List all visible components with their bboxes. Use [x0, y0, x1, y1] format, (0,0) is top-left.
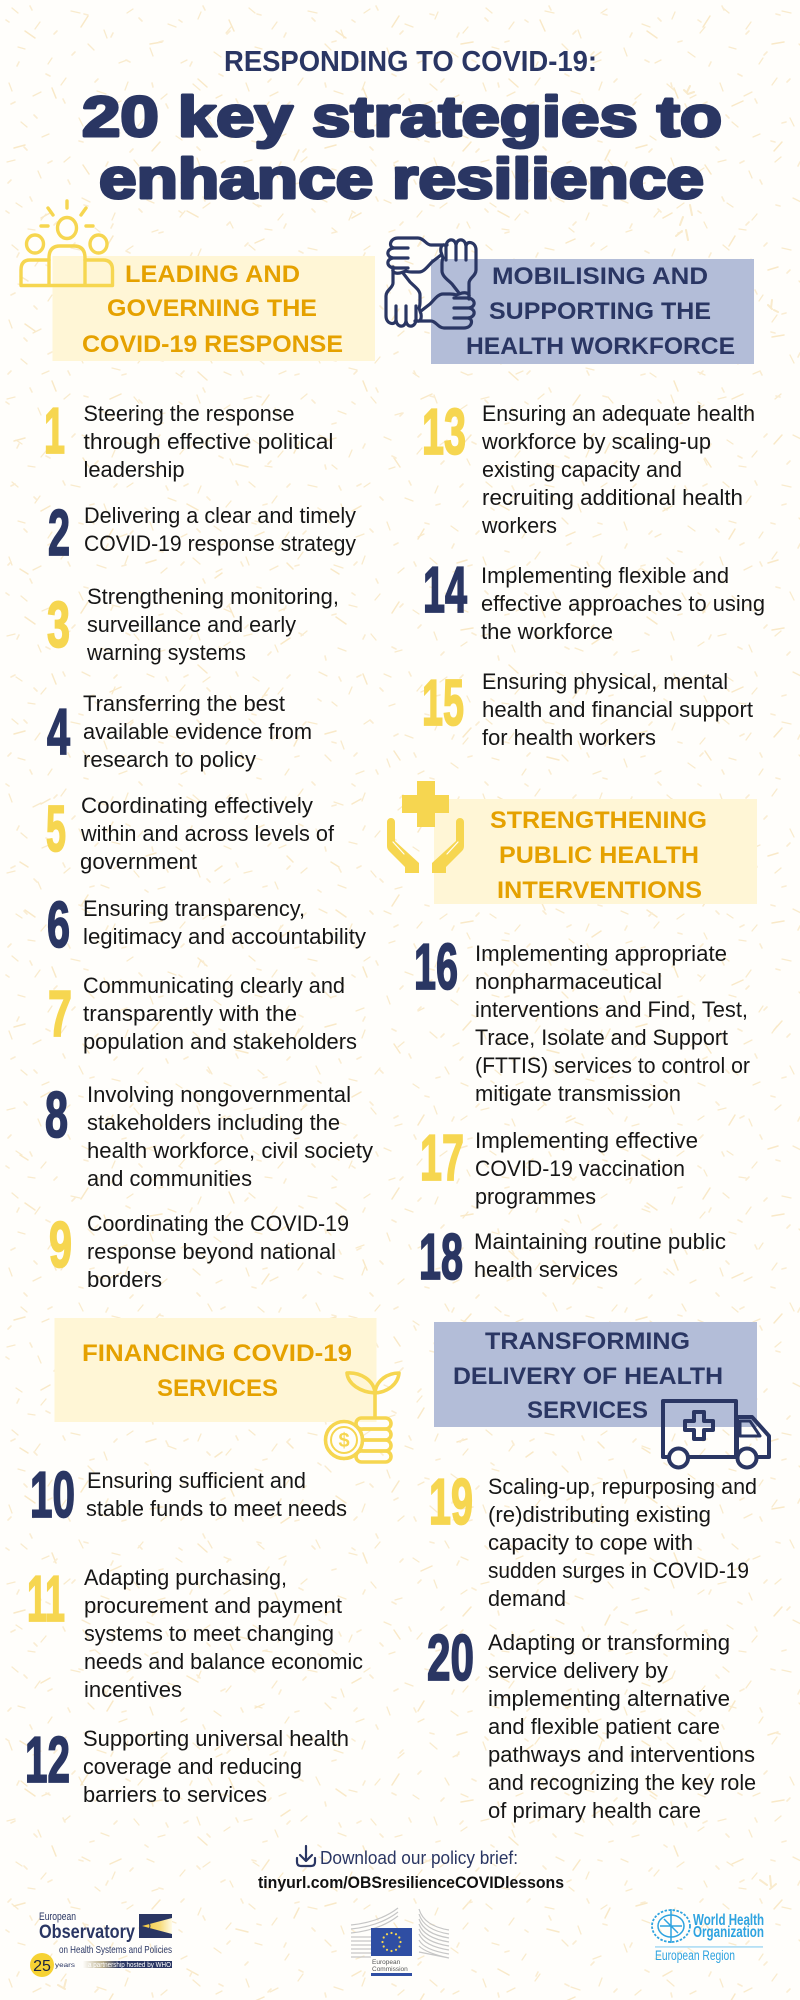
download link: tinyurl.com/OBSresilienceCOVIDlessons: [258, 1873, 564, 1892]
strategy 20 text: and flexible patient care: [488, 1714, 720, 1739]
strategy 14 text: effective approaches to using: [481, 591, 765, 616]
strategy 7 text: transparently with the: [83, 1001, 297, 1026]
strategy 1 text: Steering the response: [84, 401, 294, 426]
strategy 19 text: capacity to cope with: [488, 1530, 693, 1555]
strategy 14: [423, 553, 765, 644]
strategy 7: [48, 973, 357, 1054]
heading text: COVID-19 RESPONSE: [82, 331, 343, 358]
download call to action: [258, 1846, 564, 1892]
strategy 18 text: health services: [474, 1257, 618, 1282]
strategy 1 text: through effective political: [84, 429, 334, 454]
number 13: 13: [422, 395, 466, 468]
number 8: 8: [45, 1078, 68, 1151]
heading text: [82, 261, 343, 358]
strategy 17 text: programmes: [475, 1184, 596, 1209]
strategy 11 text: needs and balance economic: [84, 1649, 363, 1674]
title: [82, 46, 722, 211]
strategy 3 text: [86, 584, 339, 665]
strategy 15 text: health and financial support: [482, 697, 753, 722]
strategy 12 text: Supporting universal health: [83, 1726, 349, 1751]
strategy 11 text: incentives: [84, 1677, 182, 1702]
strategy 13 text: Ensuring an adequate health: [482, 401, 755, 426]
strategy 3 text: warning systems: [86, 640, 246, 665]
strategy 9 text: [87, 1211, 349, 1292]
strategy 9 text: response beyond national: [87, 1239, 336, 1264]
strategy 10: [30, 1458, 347, 1531]
strategy 2 text: COVID-19 response strategy: [84, 531, 356, 556]
number 4: 4: [47, 695, 70, 768]
heading text: [466, 263, 735, 360]
strategy 16 text: Implementing appropriate: [475, 941, 727, 966]
strategy 16 text: mitigate transmission: [475, 1081, 681, 1106]
strategy 4 text: [83, 691, 312, 772]
strategy 17: [420, 1121, 698, 1209]
strategy 20: [427, 1621, 756, 1823]
strategy 4: [47, 691, 312, 772]
strategy 20 text: pathways and interventions: [488, 1742, 755, 1767]
logo: European Commission: [351, 1908, 449, 1976]
heading text: SERVICES: [157, 1375, 278, 1402]
strategy 16 text: interventions and Find, Test,: [475, 997, 748, 1022]
strategy 11 text: [84, 1565, 363, 1702]
main title: 20 key strategies to: [82, 85, 722, 149]
strategy 1: [44, 394, 334, 482]
strategy 5 text: [80, 793, 335, 874]
strategy 8 text: health workforce, civil society: [87, 1138, 373, 1163]
strategy 14 text: [481, 563, 765, 644]
heading text: SERVICES: [527, 1397, 648, 1424]
icon: people with light rays: [21, 201, 112, 286]
strategy 20 text: [488, 1630, 756, 1823]
logo: World Health Organization: World Health: [693, 1912, 764, 1929]
strategy 11: [27, 1562, 363, 1702]
panel: mobilising workforce heading: [386, 238, 754, 364]
strategy 2 text: Delivering a clear and timely: [84, 503, 356, 528]
strategy 3: [47, 584, 339, 665]
number 6: 6: [47, 888, 70, 961]
strategy 7 text: population and stakeholders: [83, 1029, 357, 1054]
number 16: 16: [414, 930, 458, 1003]
strategy 10 text: [86, 1468, 347, 1521]
strategy 8 text: stakeholders including the: [87, 1110, 340, 1135]
strategy 6 text: Ensuring transparency,: [83, 896, 305, 921]
strategy 5 text: Coordinating effectively: [81, 793, 313, 818]
strategy 18: [419, 1220, 726, 1293]
number 17: 17: [420, 1121, 464, 1194]
main title: enhance resilience: [99, 147, 704, 211]
strategy 17 text: COVID-19 vaccination: [475, 1156, 685, 1181]
strategy 2: [48, 496, 356, 569]
panel: financing heading: [54, 1318, 399, 1462]
strategy 1 text: [84, 401, 334, 482]
number 20: 20: [427, 1621, 474, 1694]
logo: World Health Organization: European Region: [655, 1948, 735, 1963]
number 9: 9: [49, 1208, 72, 1281]
heading text: STRENGTHENING: [490, 807, 707, 834]
strategy 20 text: Adapting or transforming: [488, 1630, 730, 1655]
strategy 4 text: available evidence from: [83, 719, 312, 744]
strategy 4 text: Transferring the best: [83, 691, 285, 716]
strategy 1 text: leadership: [84, 457, 184, 482]
logo: European Commission: Commission: [372, 1966, 408, 1973]
strategy 8 text: Involving nongovernmental: [87, 1082, 351, 1107]
heading text: HEALTH WORKFORCE: [466, 333, 735, 360]
strategy 10 text: stable funds to meet needs: [86, 1496, 347, 1521]
heading text: TRANSFORMING: [485, 1328, 690, 1355]
strategy 6: [47, 888, 366, 961]
strategy 9: [49, 1208, 349, 1292]
strategy 5 text: government: [80, 849, 197, 874]
number 7: 7: [48, 977, 72, 1050]
strategy 13 text: recruiting additional health: [482, 485, 743, 510]
logo: European Observatory: years: [55, 1963, 75, 1969]
strategy 18 text: Maintaining routine public: [474, 1229, 726, 1254]
strategy 8: [45, 1078, 373, 1191]
strategy 20 text: service delivery by: [488, 1658, 668, 1683]
strategy 15 text: for health workers: [482, 725, 656, 750]
strategy 11 text: procurement and payment: [84, 1593, 342, 1618]
strategy 14 text: the workforce: [481, 619, 613, 644]
heading text: SUPPORTING THE: [489, 298, 711, 325]
strategy 16 text: (FTTIS) services to control or: [475, 1053, 750, 1078]
logo: European Observatory: Observatory: [39, 1922, 135, 1943]
panel: strengthening public health heading: [387, 781, 757, 904]
strategy 2 text: [84, 503, 356, 556]
heading text: [82, 1340, 352, 1402]
strategy 5 text: within and across levels of: [80, 821, 335, 846]
logo: European Observatory: 25: [33, 1958, 51, 1975]
strategy 19 text: Scaling-up, repurposing and: [488, 1474, 757, 1499]
strategy 10 text: Ensuring sufficient and: [87, 1468, 306, 1493]
strategy 6 text: legitimacy and accountability: [83, 924, 366, 949]
logo: European Commission: European: [372, 1959, 401, 1966]
strategy 9 text: borders: [87, 1267, 162, 1292]
strategy 18 text: [474, 1229, 726, 1282]
strategy 13 text: [481, 401, 755, 538]
strategy 5: [46, 792, 335, 874]
logo: European Observatory: European: [39, 1911, 76, 1923]
icon: ambulance: [663, 1401, 769, 1468]
strategy 16: [414, 930, 750, 1106]
logo: European Observatory: a partnership hosted by WHO: [88, 1962, 171, 1969]
number 3: 3: [47, 588, 70, 661]
strategy 13 text: workforce by scaling-up: [481, 429, 711, 454]
strategy 11 text: Adapting purchasing,: [84, 1565, 287, 1590]
number 1: 1: [44, 394, 65, 467]
strategy 3 text: Strengthening monitoring,: [87, 584, 339, 609]
strategy 8 text: [87, 1082, 373, 1191]
strategy 15: [422, 666, 753, 750]
dollar sign: $: [338, 1430, 350, 1452]
strategy 12 text: [83, 1726, 349, 1807]
heading text: MOBILISING AND: [492, 263, 708, 290]
strategy 6 text: [83, 896, 366, 949]
panel: leading and governing heading: [21, 201, 375, 361]
heading text: INTERVENTIONS: [497, 877, 702, 904]
strategy 4 text: research to policy: [83, 747, 256, 772]
number 19: 19: [429, 1465, 473, 1538]
heading text: DELIVERY OF HEALTH: [453, 1363, 723, 1390]
strategy 20 text: of primary health care: [488, 1798, 701, 1823]
logo: World Health Organization: [652, 1909, 764, 1963]
number 5: 5: [46, 792, 66, 865]
strategy 19 text: [488, 1474, 757, 1611]
strategy 19 text: sudden surges in COVID-19: [488, 1558, 749, 1583]
strategy 16 text: nonpharmaceutical: [475, 969, 662, 994]
strategy 12: [25, 1723, 349, 1807]
strategy 17 text: Implementing effective: [475, 1128, 698, 1153]
strategy 13: [422, 395, 755, 538]
panel: transforming delivery heading: [434, 1322, 769, 1468]
strategy 3 text: surveillance and early: [87, 612, 296, 637]
heading text: [490, 807, 707, 904]
heading text: GOVERNING THE: [107, 295, 317, 322]
strategy 20 text: implementing alternative: [488, 1686, 730, 1711]
number 11: 11: [27, 1562, 65, 1635]
strategy 7 text: [83, 973, 357, 1054]
strategy 12 text: barriers to services: [83, 1782, 267, 1807]
logo: World Health Organization: Organization: [693, 1924, 764, 1941]
strategy 8 text: and communities: [87, 1166, 252, 1191]
icon: hands holding a cross: [387, 781, 464, 873]
number 14: 14: [423, 553, 467, 626]
strategy 12 text: coverage and reducing: [83, 1754, 302, 1779]
number 18: 18: [419, 1220, 463, 1293]
strategy 9 text: Coordinating the COVID-19: [87, 1211, 349, 1236]
strategy 11 text: systems to meet changing: [84, 1621, 334, 1646]
strategy 19 text: (re)distributing existing: [488, 1502, 711, 1527]
logo: European Observatory: [30, 1911, 172, 1977]
main title: [82, 85, 722, 211]
number 15: 15: [422, 666, 464, 739]
logo: European Observatory: on Health Systems and Policies: [59, 1944, 172, 1956]
strategy 13 text: workers: [481, 513, 557, 538]
strategy 7 text: Communicating clearly and: [83, 973, 345, 998]
number 12: 12: [25, 1723, 70, 1796]
heading text: [453, 1328, 723, 1424]
strategy 20 text: and recognizing the key role: [488, 1770, 756, 1795]
download label: Download our policy brief:: [320, 1848, 518, 1868]
heading text: FINANCING COVID-19: [82, 1340, 352, 1367]
strategy 13 text: existing capacity and: [482, 457, 682, 482]
strategy 16 text: [475, 941, 750, 1106]
strategy 17 text: [475, 1128, 698, 1209]
icon: four linked hands: [386, 238, 476, 328]
strategy 19: [429, 1465, 757, 1611]
strategy 15 text: Ensuring physical, mental: [482, 669, 728, 694]
icon: plant growing from coins: [326, 1373, 399, 1462]
subtitle: responding to covid-19: RESPONDING TO COVID-19:: [224, 46, 597, 78]
heading text: PUBLIC HEALTH: [499, 842, 699, 869]
icon: download arrow: [297, 1846, 315, 1866]
strategy 15 text: [482, 669, 753, 750]
heading text: LEADING AND: [125, 261, 300, 288]
strategy 19 text: demand: [488, 1586, 566, 1611]
number 10: 10: [30, 1458, 75, 1531]
strategy 14 text: Implementing flexible and: [481, 563, 729, 588]
strategy 16 text: Trace, Isolate and Support: [475, 1025, 728, 1050]
number 2: 2: [48, 496, 70, 569]
